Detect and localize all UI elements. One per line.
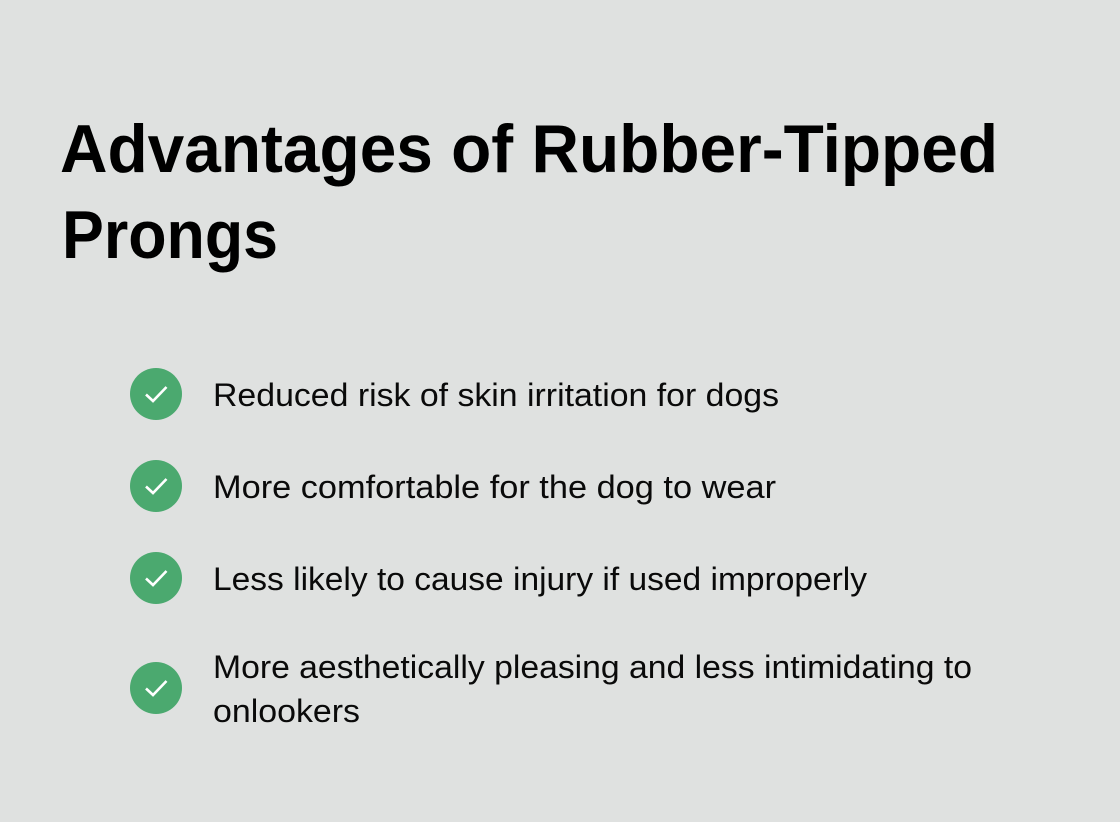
- list item: aesthetics: More aesthetically pleasing and less intimidating to: [213, 649, 972, 685]
- list item: injury: [130, 552, 867, 604]
- list item: skin irritation: [130, 368, 779, 420]
- title: Advantages of Rubber-Tipped: [60, 111, 998, 187]
- list item: comfortable: [130, 460, 776, 512]
- list item: injury: Less likely to cause injury if used improperly: [213, 561, 867, 597]
- icon: check: [130, 460, 182, 512]
- title: Prongs: [62, 197, 278, 273]
- list item: comfortable: More comfortable for the dog to wear: [213, 469, 776, 505]
- list item: skin irritation: Reduced risk of skin irritation for dogs: [213, 377, 779, 413]
- icon: check: [130, 368, 182, 420]
- list item: aesthetics: [130, 649, 972, 729]
- icon: check: [130, 662, 182, 714]
- icon: check: [130, 552, 182, 604]
- list item: aesthetics: onlookers: [213, 693, 360, 729]
- title: [60, 111, 998, 273]
